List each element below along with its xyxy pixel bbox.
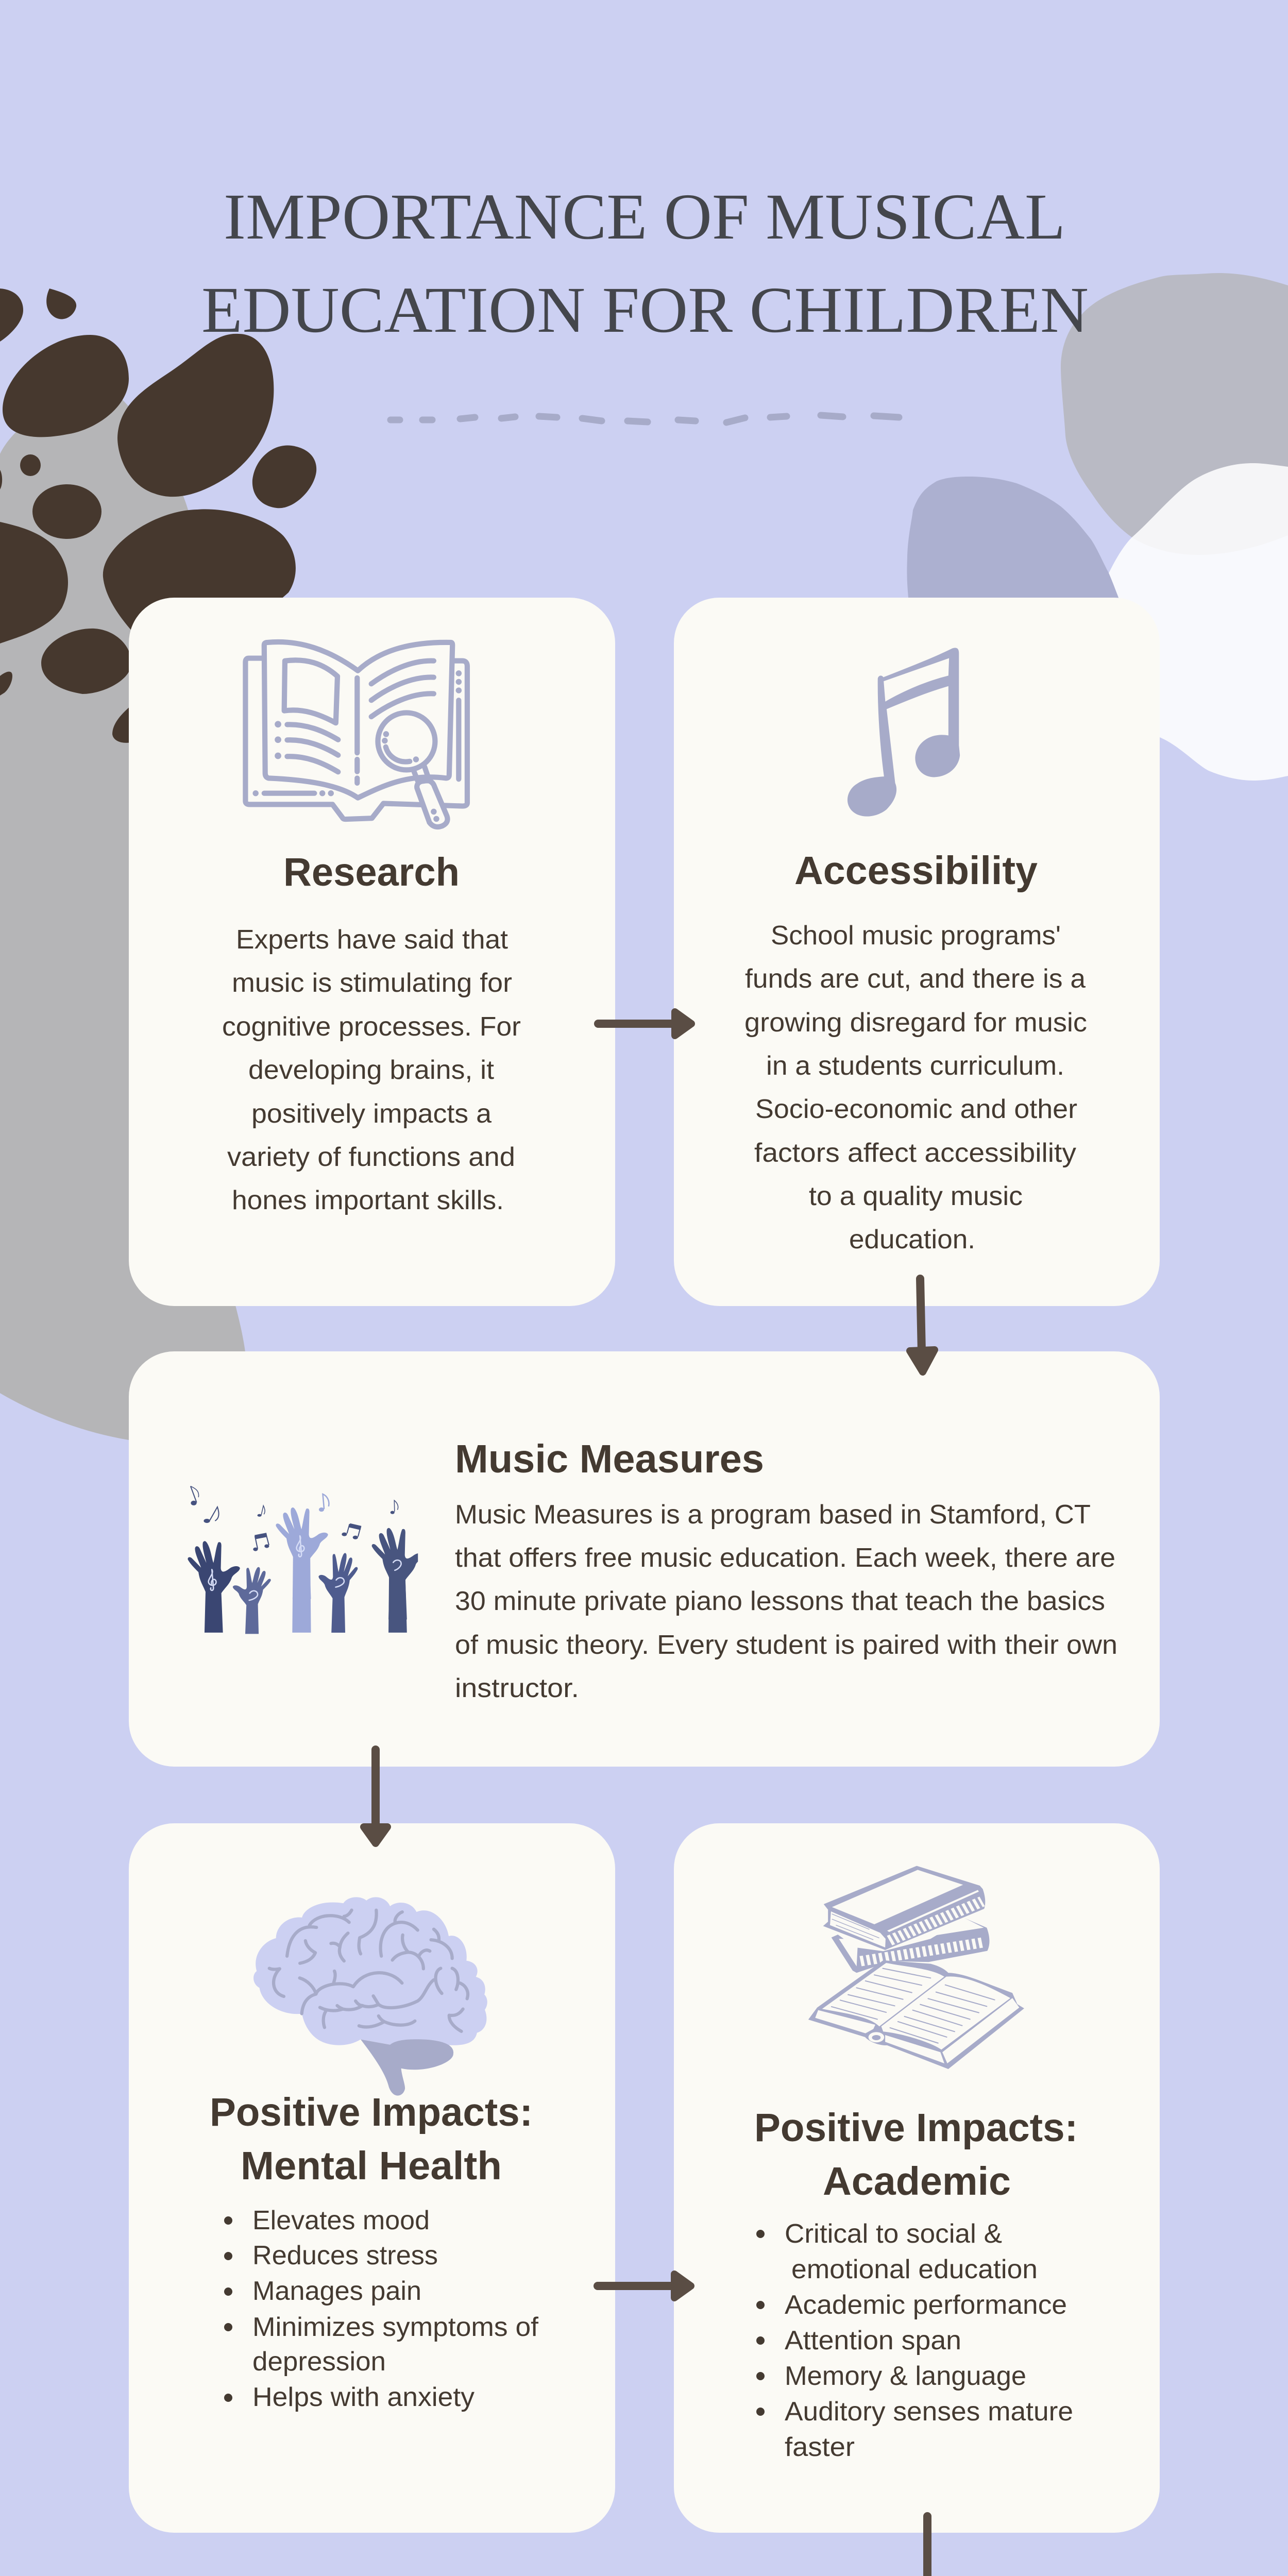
list: mental health	[224, 2206, 539, 2412]
arrow: accessibility to music measures	[910, 1279, 935, 1372]
list: mental health: Reduces stress	[252, 2241, 438, 2270]
text: music measures body: instructor.	[455, 1673, 579, 1703]
list: mental health: Elevates mood	[252, 2206, 430, 2235]
list: academic: Academic performance	[785, 2290, 1067, 2320]
panel: accessibility	[674, 598, 1160, 1306]
title: IMPORTANCE OF MUSICAL	[224, 181, 1065, 253]
title divider: hand-drawn dashes	[391, 415, 899, 422]
background blob: right purple	[907, 477, 1121, 603]
text: accessibility body: to a quality music	[809, 1181, 1023, 1211]
text: music measures body: of music theory. Every student is paired with their own	[455, 1630, 1117, 1660]
hand 1	[188, 1541, 240, 1633]
text: research body: hones important skills.	[232, 1185, 504, 1215]
list: academic: Critical to social &	[785, 2219, 1002, 2249]
list: mental health: depression	[252, 2347, 386, 2377]
text: accessibility body: education.	[849, 1225, 975, 1255]
heading: academic: Positive Impacts:	[754, 2106, 1078, 2150]
hand 2	[233, 1567, 271, 1634]
icon: stack of books	[808, 1866, 1024, 2069]
heading: music measures: Music Measures	[455, 1437, 764, 1481]
text: accessibility body: in a students curriculum.	[766, 1051, 1064, 1081]
list: academic: Memory & language	[785, 2361, 1026, 2391]
text: research body: variety of functions and	[227, 1142, 515, 1172]
small notes	[191, 1486, 398, 1551]
arrow: mental health to academic	[598, 2274, 691, 2298]
background blob: right gray	[1061, 273, 1288, 555]
hand 3	[276, 1507, 328, 1633]
arrow: research to accessibility	[598, 1012, 691, 1036]
arrow: music measures to mental health	[364, 1750, 387, 1843]
list: academic: Attention span	[785, 2326, 961, 2355]
background blobs: dark spots	[0, 289, 316, 743]
list: academic: faster	[785, 2432, 855, 2462]
list: academic	[756, 2219, 1073, 2462]
background blob: left gray	[0, 398, 247, 1440]
text: research body: music is stimulating for	[232, 968, 512, 998]
heading: mental health: Mental Health	[241, 2144, 502, 2188]
text: accessibility body: Socio-economic and other	[755, 1094, 1077, 1124]
background blob: right white	[1082, 463, 1288, 781]
open book	[808, 1960, 1024, 2069]
text: accessibility body: School music programs'	[771, 921, 1061, 951]
heading: mental health: Positive Impacts:	[210, 2090, 533, 2134]
text: research body: positively impacts a	[251, 1099, 492, 1129]
title	[201, 181, 1089, 346]
text: music measures body: Music Measures is a program based in Stamford, CT	[455, 1500, 1091, 1530]
heading: research: Research	[283, 850, 460, 894]
title: EDUCATION FOR CHILDREN	[201, 274, 1089, 346]
hand 5	[372, 1528, 418, 1633]
list: mental health: Helps with anxiety	[252, 2382, 474, 2412]
panel: academic	[674, 1823, 1160, 2533]
clefs on hands	[209, 1536, 401, 1600]
text: music measures body: 30 minute private piano lessons that teach the basics	[455, 1586, 1105, 1616]
lower closed book	[832, 1918, 989, 1973]
icon: music note	[848, 648, 960, 817]
icon: open book with magnifier	[245, 642, 467, 827]
heading: mental health	[210, 2090, 533, 2188]
text: research body: cognitive processes. For	[222, 1012, 521, 1042]
heading: academic: Academic	[823, 2159, 1011, 2204]
panel: research	[129, 598, 615, 1306]
text: music measures body	[455, 1500, 1117, 1703]
text: research body: developing brains, it	[248, 1055, 495, 1085]
hand 4	[318, 1553, 358, 1633]
text: music measures body: that offers free music education. Each week, there are	[455, 1543, 1115, 1573]
panel: mental health	[129, 1823, 615, 2533]
panel: music measures	[129, 1351, 1160, 1767]
list: academic: Auditory senses mature	[785, 2397, 1073, 2427]
upper closed book	[823, 1866, 985, 1950]
text: accessibility body: funds are cut, and there is a	[745, 964, 1086, 994]
arrow: academic to community	[915, 2516, 940, 2576]
list: mental health: Minimizes symptoms of	[252, 2312, 539, 2342]
text: accessibility body: growing disregard for music	[744, 1008, 1087, 1038]
heading: academic	[754, 2106, 1078, 2204]
icon: raised hands with music notes	[188, 1486, 424, 1634]
icon: brain	[253, 1897, 487, 2096]
text: research body	[222, 925, 521, 1215]
list: mental health: Manages pain	[252, 2276, 421, 2306]
heading: accessibility: Accessibility	[794, 849, 1038, 893]
text: accessibility body	[744, 921, 1087, 1255]
list: academic: emotional education	[791, 2255, 1038, 2284]
text: research body: Experts have said that	[236, 925, 509, 955]
text: accessibility body: factors affect accessibility	[754, 1138, 1076, 1168]
